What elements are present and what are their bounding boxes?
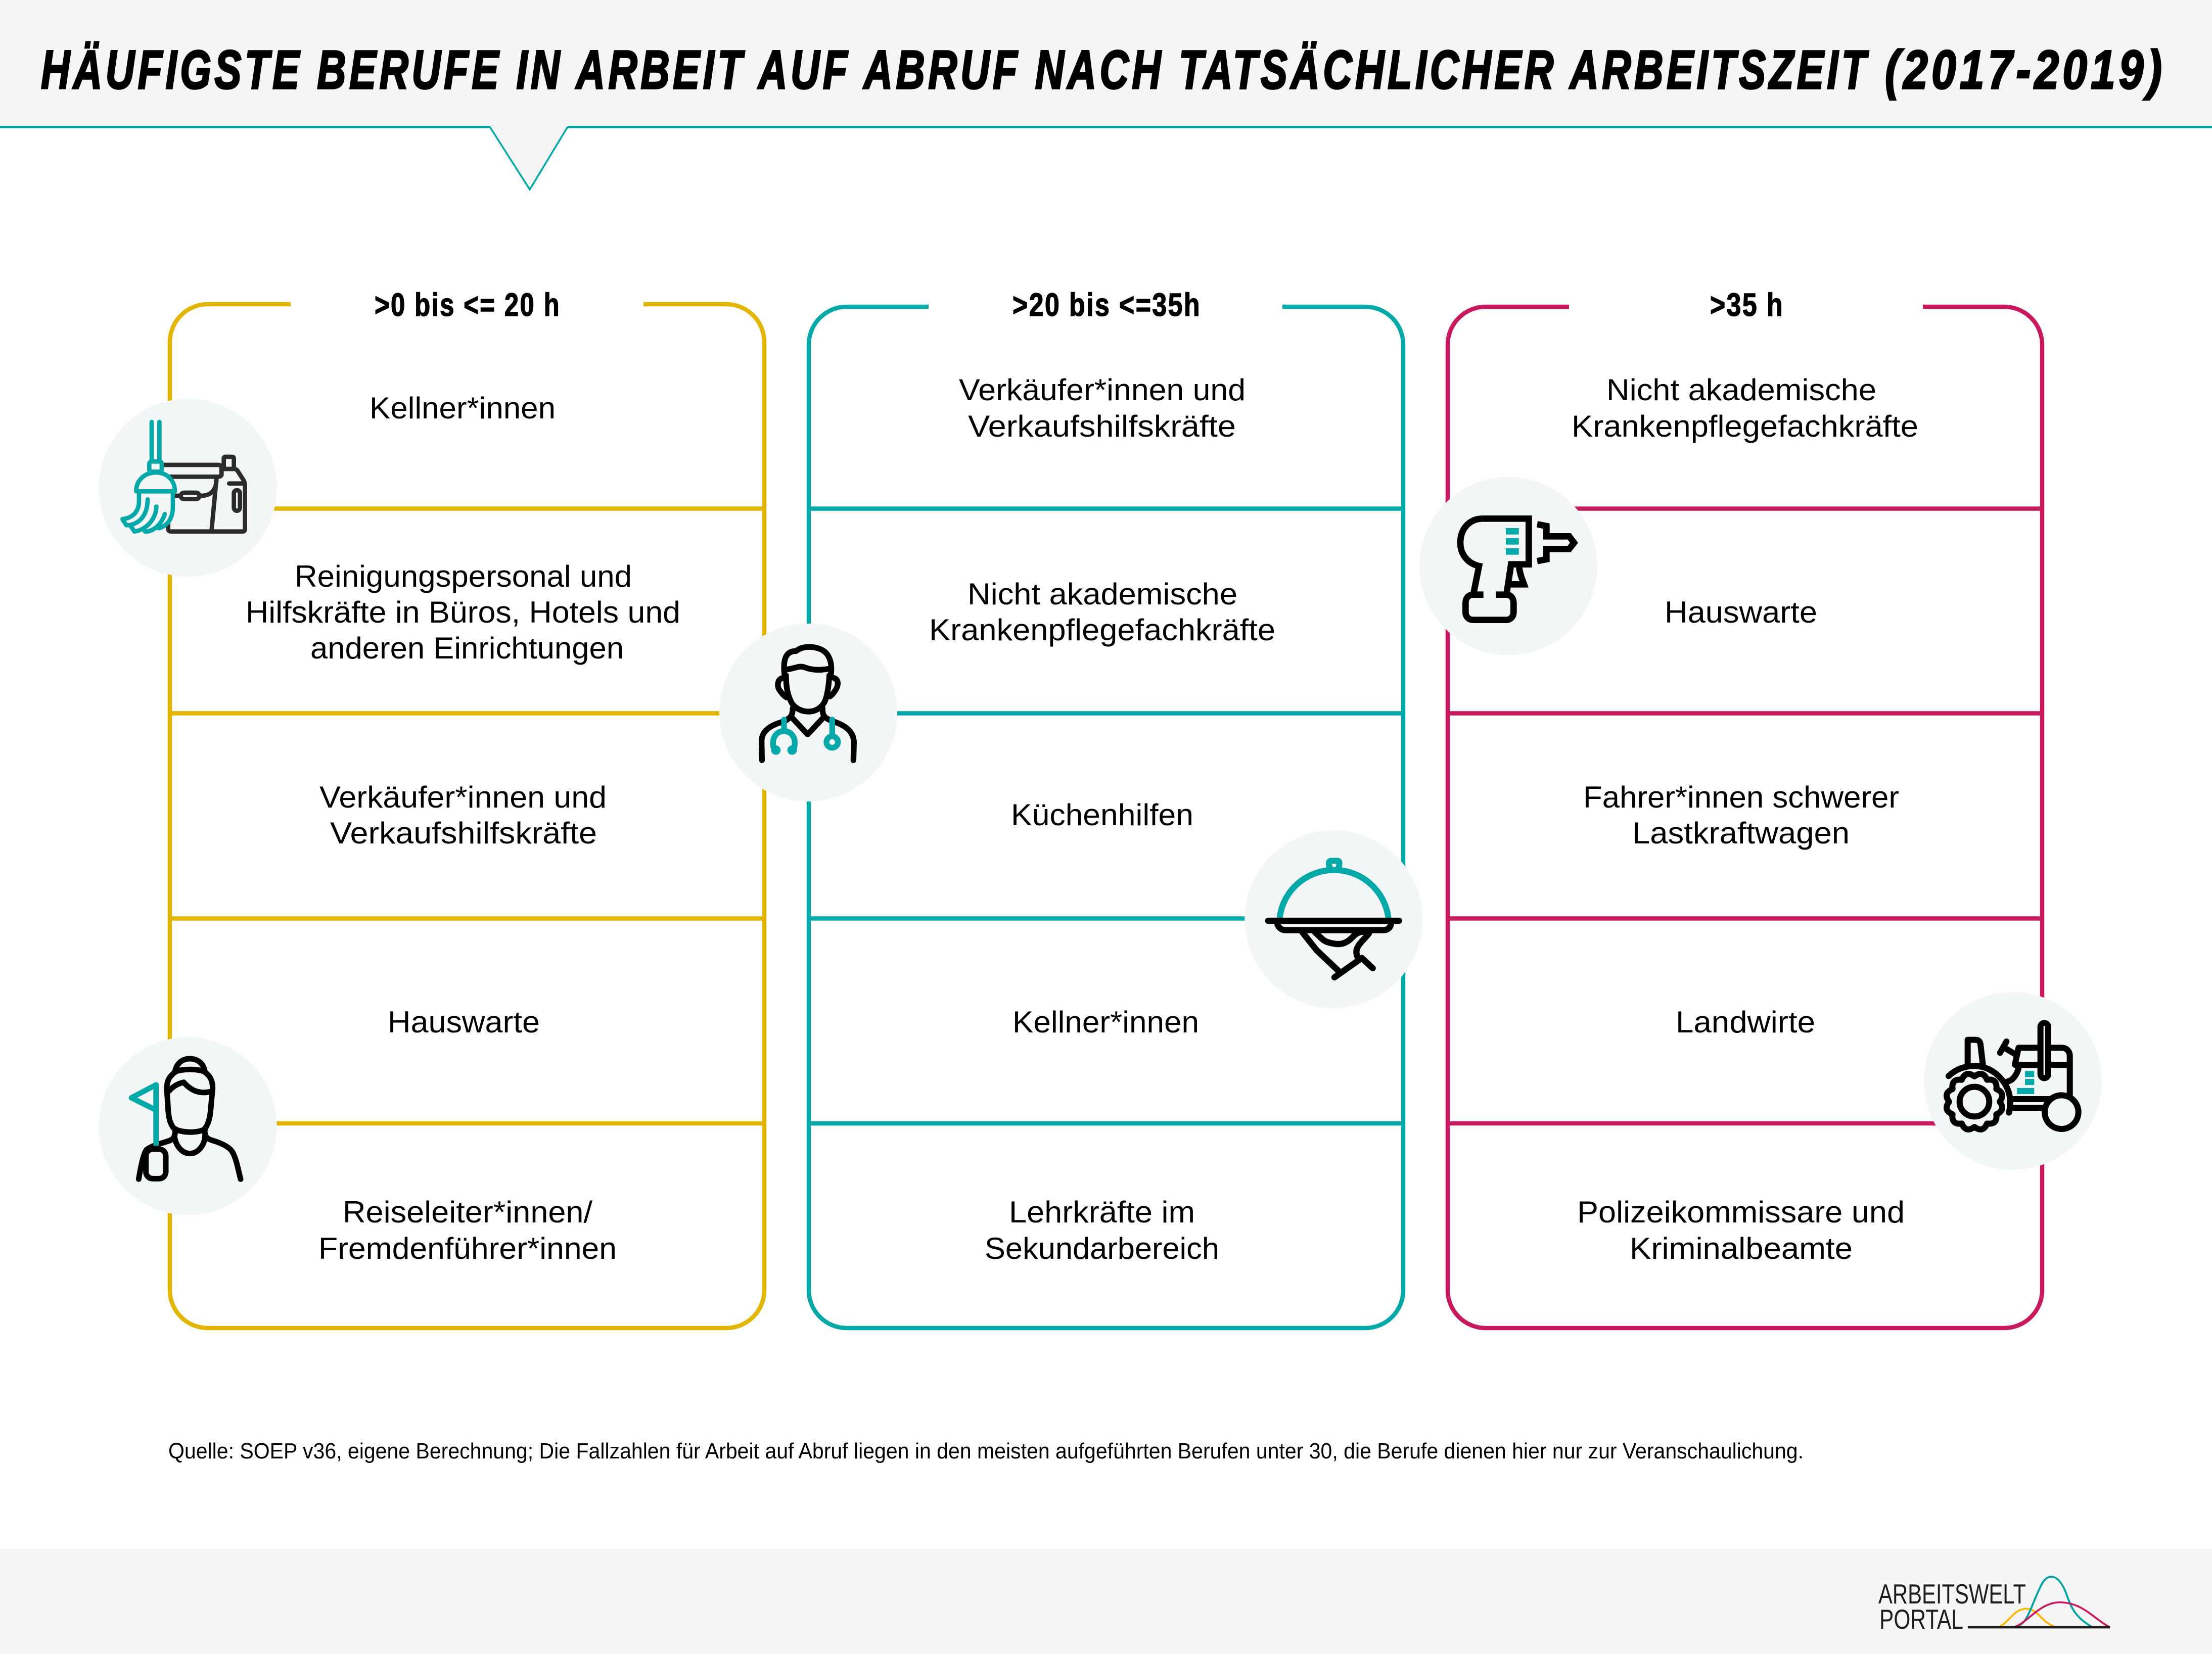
source note: Quelle: SOEP v36, eigene Berechnung; Die Fallzahlen für Arbeit auf Abruf liegen in den meisten aufgeführten Berufen unter 30, die Berufe dienen hier nur zur Veranschaulichung.	[168, 1439, 1804, 1463]
logo: Arbeitswelt Portal: ARBEITSWELT	[1878, 1578, 2026, 1610]
panel: bis 20 Stunden	[170, 287, 764, 1328]
occupation list: Verkäufer*innen und	[319, 780, 607, 814]
panel frame teal	[809, 307, 1403, 1328]
panel heading: >35 h	[1710, 287, 1784, 323]
icon: serving tray	[1245, 830, 1422, 1008]
occupation list	[929, 373, 1275, 1265]
occupation list: Landwirte	[1676, 1005, 1815, 1039]
header band	[0, 0, 2212, 191]
occupation list: Lehrkräfte im	[1009, 1195, 1195, 1229]
occupation list: Kellner*innen	[370, 391, 556, 425]
occupation list: Fahrer*innen schwerer	[1583, 780, 1899, 814]
icon: doctor	[719, 624, 897, 801]
occupation list: Krankenpflegefachkräfte	[929, 613, 1275, 647]
panel frame pink	[1448, 307, 2042, 1328]
occupation list: Sekundarbereich	[985, 1232, 1219, 1265]
occupation list: Hilfskräfte in Büros, Hotels und	[246, 595, 680, 629]
occupation list: Hauswarte	[388, 1005, 540, 1039]
panel heading: >0 bis <= 20 h	[375, 287, 561, 323]
occupation list: Hauswarte	[1665, 595, 1817, 629]
occupation list: Lastkraftwagen	[1632, 816, 1850, 850]
occupation list: Küchenhilfen	[1011, 798, 1193, 832]
icon: mop, bucket and bottle	[99, 399, 277, 577]
occupation list: Kriminalbeamte	[1630, 1232, 1853, 1265]
icon: tractor	[1924, 992, 2102, 1170]
logo: Arbeitswelt Portal: PORTAL	[1879, 1603, 1963, 1635]
occupation list	[246, 391, 680, 1265]
occupation list: Krankenpflegefachkräfte	[1572, 409, 1918, 443]
occupation list: Reiseleiter*innen/	[343, 1195, 592, 1229]
occupation list: Nicht akademische	[1606, 373, 1876, 407]
occupation list: Reinigungspersonal und	[295, 559, 632, 593]
icon: tour guide	[99, 1037, 277, 1215]
occupation list: Verkaufshilfskräfte	[968, 409, 1236, 443]
occupation list: anderen Einrichtungen	[310, 631, 624, 665]
occupation list: Kellner*innen	[1012, 1005, 1199, 1039]
panel: ueber 35 Stunden	[1448, 287, 2042, 1328]
occupation list: Verkäufer*innen und	[959, 373, 1246, 407]
occupation list: Fremdenführer*innen	[318, 1232, 617, 1265]
panel frame yellow	[170, 304, 764, 1328]
footer band	[0, 1549, 2212, 1654]
logo: Arbeitswelt Portal	[1878, 1577, 2110, 1635]
panel heading: >20 bis <=35h	[1012, 287, 1201, 323]
panel: 20 bis 35 Stunden	[809, 287, 1403, 1328]
icon: power drill	[1419, 477, 1597, 655]
occupation list	[1572, 373, 1918, 1265]
occupation list: Nicht akademische	[967, 577, 1237, 611]
occupation list: Polizeikommissare und	[1577, 1195, 1905, 1229]
occupation list: Verkaufshilfskräfte	[330, 816, 597, 850]
